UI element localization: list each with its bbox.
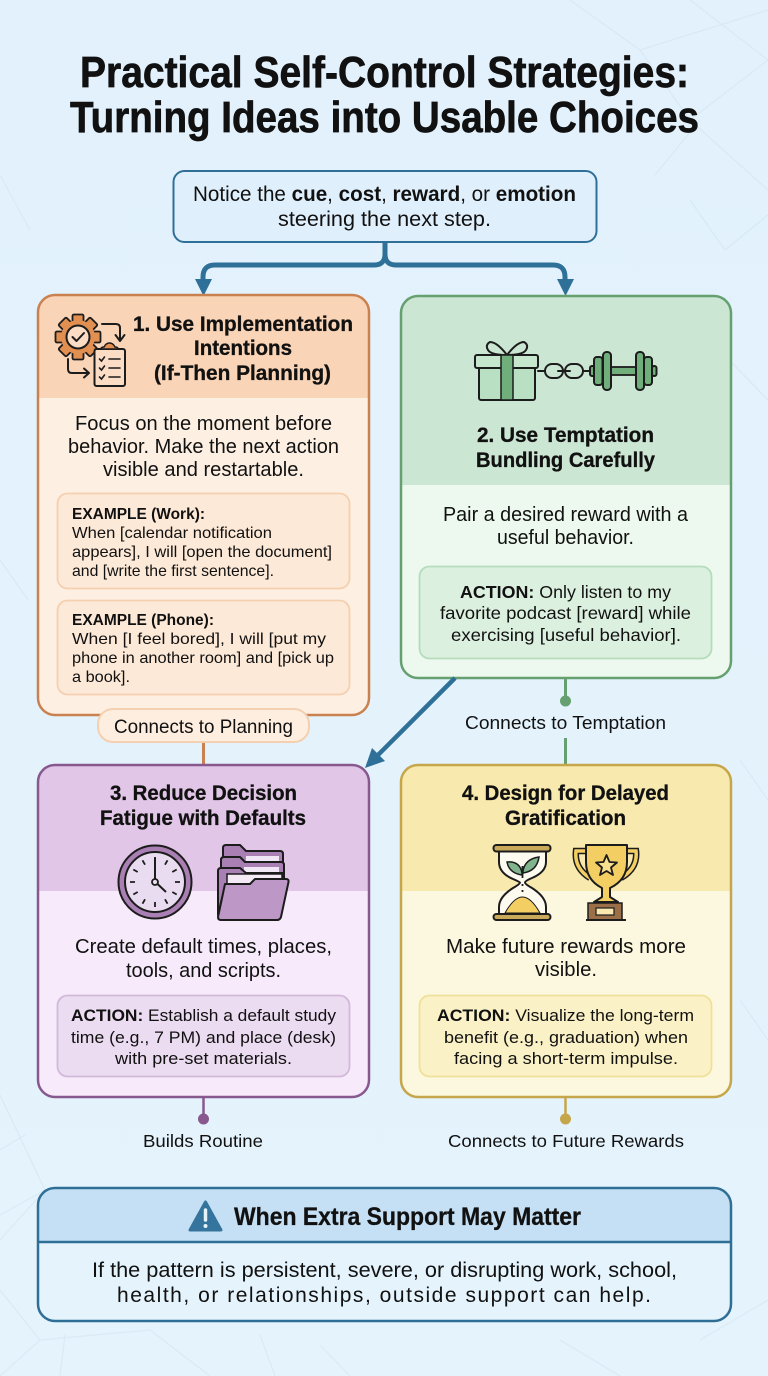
panel 1: implementation intentions	[38, 295, 369, 715]
example: work	[58, 494, 350, 588]
heading	[100, 782, 306, 830]
example: phone	[58, 600, 350, 694]
heading	[476, 424, 655, 472]
text block: Pair a desired reward with a	[443, 503, 689, 526]
action box: exercising [useful behavior].	[451, 625, 681, 645]
heading	[462, 782, 669, 830]
text block: useful behavior.	[497, 526, 634, 549]
action box: ACTION: Visualize the long-term	[437, 1007, 694, 1025]
heading: Gratification	[505, 807, 626, 830]
title: Turning Ideas into Usable Choices	[70, 94, 699, 142]
icon: warning triangle	[190, 1202, 221, 1230]
text block: visible.	[535, 958, 597, 981]
arrow: diagonal to panel 3	[365, 678, 455, 768]
text block	[446, 935, 686, 981]
example: work: When [calendar notification	[72, 525, 272, 542]
heading: 1. Use Implementation	[133, 313, 353, 336]
text block: Create default times, places,	[75, 935, 332, 958]
example: work: and [write the first sentence].	[72, 563, 274, 580]
action box: facing a short-term impulse.	[454, 1050, 678, 1068]
heading: Intentions	[194, 337, 292, 360]
text block: health, or relationships, outside support can help.	[117, 1284, 651, 1307]
heading: (If-Then Planning)	[154, 362, 331, 385]
connector: planning to panel 3	[202, 742, 205, 766]
callout: notice the cue	[174, 171, 596, 242]
text block: behavior. Make the next action	[68, 435, 339, 458]
heading	[133, 313, 353, 385]
title	[70, 49, 699, 142]
action box: with pre-set materials.	[114, 1050, 292, 1068]
example: phone: a book].	[72, 669, 130, 686]
text block: Focus on the moment before	[75, 412, 332, 435]
icon: folders	[218, 845, 289, 920]
title: Practical Self-Control Strategies:	[80, 49, 689, 97]
text block	[68, 412, 339, 481]
action box: ACTION: Only listen to my	[460, 582, 671, 602]
connector: builds routine	[143, 1097, 263, 1151]
heading: When Extra Support May Matter	[234, 1203, 581, 1231]
text block: visible and restartable.	[103, 458, 304, 481]
connector: temptation	[465, 678, 666, 766]
icon: gear and checklist	[56, 314, 125, 386]
example: phone: When [I feel bored], I will [put my	[72, 631, 326, 648]
example: work: appears], I will [open the document]	[72, 544, 332, 561]
pill label: connects to planning	[98, 709, 309, 742]
panel 2: temptation bundling	[401, 296, 731, 678]
connector: future rewards	[448, 1097, 684, 1151]
icon: gift chained to dumbbell	[475, 342, 656, 400]
connector: future rewards: Connects to Future Rewards	[448, 1131, 684, 1151]
connector: temptation: Connects to Temptation	[465, 713, 666, 733]
text block: tools, and scripts.	[126, 959, 281, 982]
heading: Fatigue with Defaults	[100, 807, 306, 830]
icon: clock	[118, 846, 192, 918]
action box: ACTION: Establish a default study	[71, 1007, 337, 1025]
action box: favorite podcast [reward] while	[440, 603, 691, 623]
text block: Make future rewards more	[446, 935, 686, 958]
action box	[420, 996, 712, 1076]
connector: builds routine: Builds Routine	[143, 1131, 263, 1151]
icon: hourglass with sprout	[494, 845, 550, 920]
heading: 2. Use Temptation	[477, 424, 654, 447]
icon: trophy	[576, 845, 636, 920]
pill label: connects to planning: Connects to Planning	[114, 717, 293, 738]
callout: notice the cue: steering the next step.	[278, 208, 491, 231]
text block	[443, 503, 689, 549]
action box: benefit (e.g., graduation) when	[444, 1029, 688, 1047]
arrows: cue splits to panels 1 and 2	[195, 242, 574, 296]
heading: 4. Design for Delayed	[462, 782, 669, 805]
example: work: EXAMPLE (Work):	[72, 506, 205, 523]
heading: Bundling Carefully	[476, 449, 655, 472]
heading: 3. Reduce Decision	[110, 782, 297, 805]
text block	[92, 1259, 677, 1307]
panel 4: delayed gratification	[401, 765, 731, 1097]
panel: when extra support may matter	[38, 1188, 731, 1321]
example: phone: EXAMPLE (Phone):	[72, 612, 214, 629]
text block: If the pattern is persistent, severe, or disrupting work, school,	[92, 1259, 677, 1282]
example: phone: phone in another room] and [pick up	[72, 650, 334, 667]
action box: time (e.g., 7 PM) and place (desk)	[71, 1029, 336, 1047]
action box	[58, 996, 350, 1076]
panel 3: decision fatigue	[38, 765, 369, 1097]
callout: notice the cue: Notice the cue, cost, reward, or emotion	[193, 183, 576, 206]
action box	[420, 566, 712, 658]
text block	[75, 935, 332, 982]
